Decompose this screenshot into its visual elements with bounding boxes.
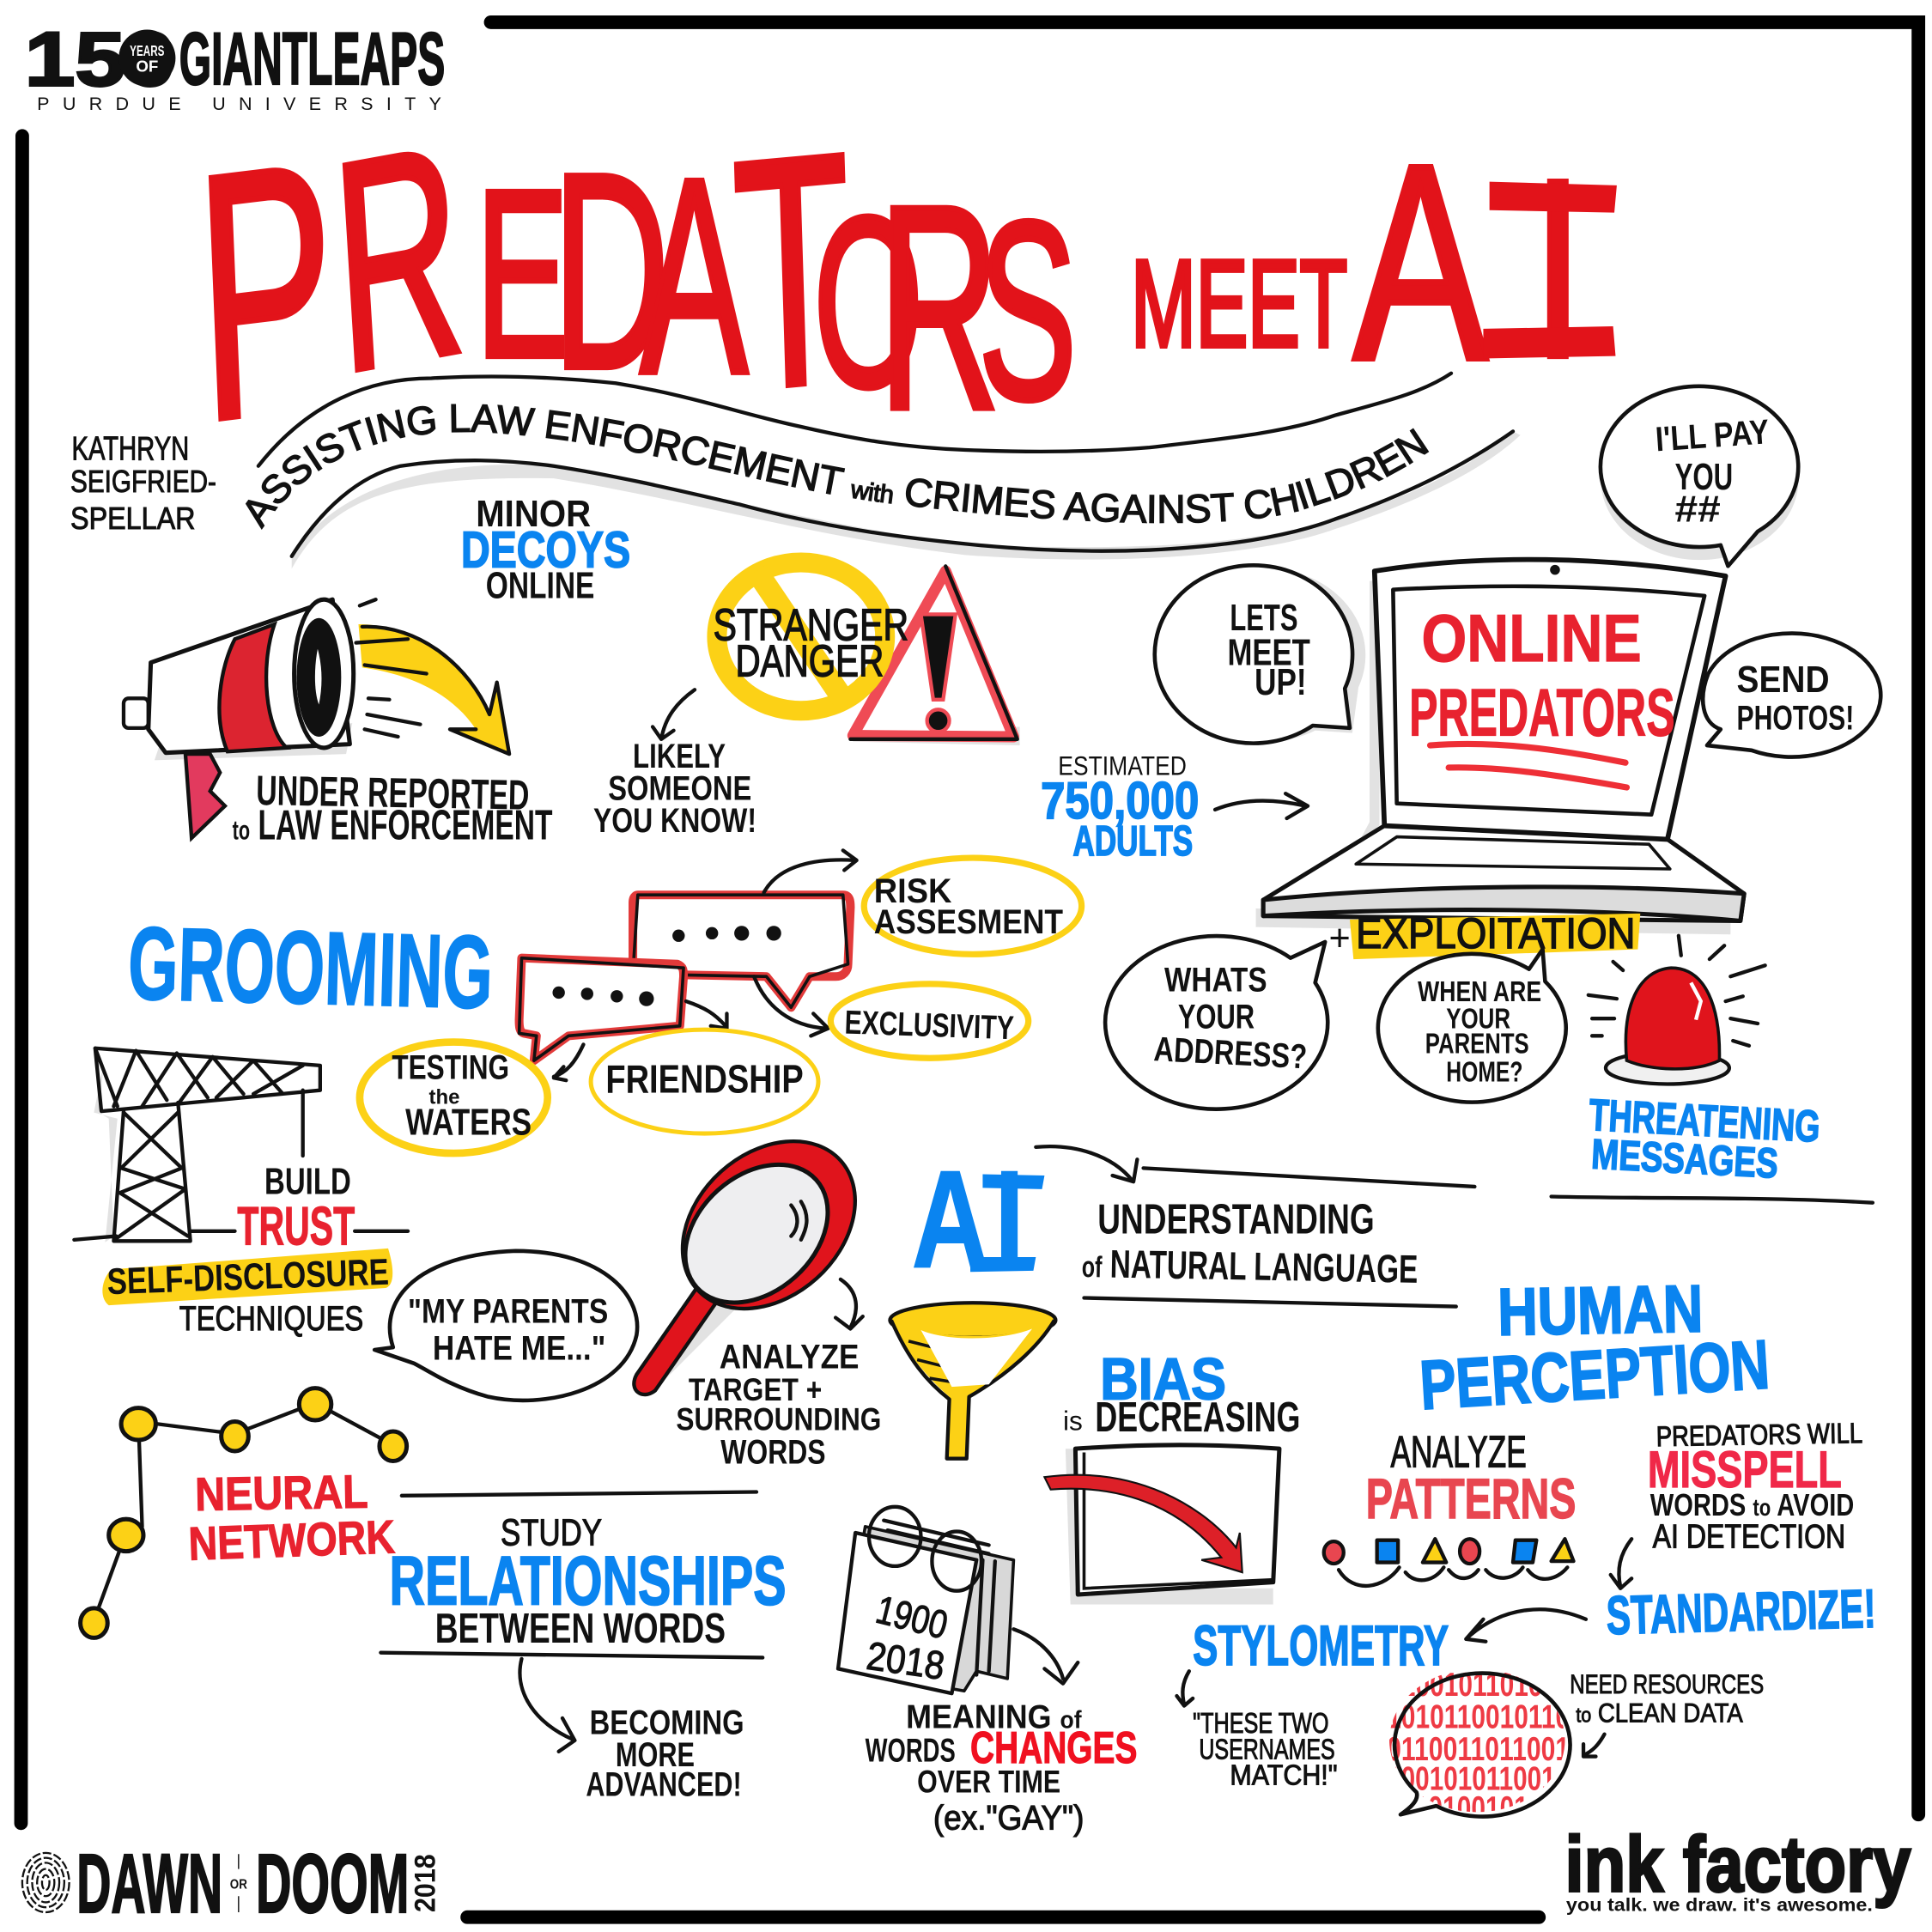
heading: human perception: PERCEPTION (1418, 1326, 1771, 1425)
presenter name: SEIGFRIED- (70, 464, 216, 499)
understanding of natural language (1036, 1146, 1474, 1307)
logo: 150 years of giant leaps: 150 (25, 15, 175, 101)
presenter name: KATHRYN (71, 431, 189, 468)
threatening messages: THREATENING (1588, 1090, 1821, 1151)
divider under threatening messages (1552, 1196, 1873, 1203)
logo: ink factory: you talk. we draw. it's awesome. (1566, 1894, 1873, 1916)
logo: 150 years of giant leaps: OF (136, 57, 158, 75)
stylometry: MATCH!" (1230, 1760, 1338, 1792)
screen text: online predators (1409, 602, 1675, 787)
exclusivity (830, 984, 1029, 1058)
speech bubble: I'll pay you (1601, 386, 1799, 566)
icon: calendar: 2018 (864, 1633, 947, 1688)
study relationships between words: STUDY (501, 1512, 602, 1553)
speech bubble: when are your parents home: YOUR (1446, 1004, 1510, 1036)
speech bubble: send photos: SEND (1737, 659, 1830, 701)
analyze patterns (1366, 1427, 1576, 1531)
predators will misspell words: MISSPELL (1648, 1440, 1842, 1498)
speech bubble: lets meet up: LETS (1230, 598, 1298, 639)
title (191, 82, 1617, 495)
subtitle banner (246, 371, 1520, 568)
icon: calendar (838, 1507, 1078, 1693)
logo: 150 years of giant leaps: PURDUE UNIVERSITY (37, 93, 441, 114)
likely someone you know: SOMEONE (608, 769, 751, 807)
speech bubble: lets meet up: UP! (1255, 662, 1307, 703)
need resources to clean data (1570, 1668, 1764, 1757)
study relationships between words (380, 1492, 787, 1752)
threatening messages: MESSAGES (1590, 1131, 1779, 1188)
meaning of words changes over time: WORDS (866, 1732, 956, 1769)
arrow to stylometry (1466, 1609, 1586, 1642)
logo: dawn or doom 2018: DOOM (256, 1836, 409, 1930)
title: MEET (1131, 234, 1347, 373)
analyze target + surrounding words: WORDS (720, 1432, 826, 1471)
icon: funnel (890, 1303, 1055, 1459)
minor decoys online: MINOR (476, 494, 591, 535)
screen text: online predators: ONLINE (1421, 602, 1642, 676)
need resources to clean data: NEED RESOURCES (1570, 1668, 1764, 1699)
exclusivity: EXCLUSIVITY (844, 1004, 1015, 1047)
minor decoys online: ONLINE (486, 566, 594, 607)
under reported text: UNDER REPORTED (256, 768, 530, 819)
estimated 750,000 adults (1041, 750, 1308, 865)
screen text: online predators: PREDATORS (1409, 677, 1675, 750)
speech bubble: when are your parents home: HOME? (1446, 1057, 1523, 1089)
becoming more advanced: MORE (616, 1735, 695, 1774)
icon: stranger danger prohibited sign (714, 562, 908, 711)
icon: laptop (1256, 560, 1744, 934)
stylometry: USERNAMES (1199, 1734, 1335, 1765)
build trust self-disclosure techniques: SELF-DISCLOSURE (106, 1252, 390, 1303)
stylometry: STYLOMETRY (1193, 1614, 1449, 1678)
icon: magnifying glass (634, 1107, 889, 1397)
estimated 750,000 adults: ADULTS (1073, 818, 1193, 865)
speech bubble: my parents hate me: HATE ME..." (433, 1328, 605, 1367)
heading: AI: I (994, 1143, 1024, 1297)
estimated 750,000 adults: ESTIMATED (1058, 750, 1187, 781)
speech bubble: my parents hate me: "MY PARENTS (408, 1291, 608, 1330)
stylometry (1176, 1614, 1449, 1792)
arrows from chat bubbles (554, 850, 857, 1080)
speech bubble: lets meet up: MEET (1227, 632, 1310, 673)
meaning of words changes over time (866, 1698, 1137, 1838)
heading: AI: A (912, 1143, 989, 1297)
speech bubble: binary data: 0110011011001 (1387, 1731, 1570, 1768)
becoming more advanced: ADVANCED! (586, 1765, 742, 1804)
presenter name: SPELLAR (70, 501, 195, 536)
speech bubble: I'll pay you: ## (1675, 489, 1721, 530)
logo: dawn or doom 2018: 2018 (410, 1854, 442, 1912)
stylometry: "THESE TWO (1193, 1708, 1329, 1740)
pattern shapes (1324, 1539, 1574, 1586)
speech bubble: binary data (1387, 1667, 1571, 1827)
analyze target + surrounding words: SURROUNDING (676, 1401, 881, 1437)
threatening messages (1588, 1090, 1821, 1188)
heading: human perception (1418, 1273, 1771, 1425)
meaning of words changes over time: (ex."GAY") (933, 1799, 1084, 1838)
friendship (591, 1030, 818, 1133)
meaning of words changes over time: MEANING of (906, 1698, 1082, 1735)
becoming more advanced (586, 1704, 744, 1804)
speech bubble: what's your address (1105, 936, 1327, 1109)
under reported text: to LAW ENFORCEMENT (233, 802, 553, 848)
chat bubbles (519, 895, 850, 1060)
presenter name (70, 431, 216, 536)
understanding of natural language: of NATURAL LANGUAGE (1081, 1241, 1419, 1291)
logo: 150 years of giant leaps: YEARS (130, 42, 164, 59)
bias is decreasing (1063, 1346, 1300, 1441)
title: E (476, 141, 568, 408)
icon: alarm siren (1589, 936, 1765, 1084)
testing the waters: WATERS (405, 1102, 532, 1143)
study relationships between words: RELATIONSHIPS (389, 1543, 787, 1620)
under reported text (233, 768, 553, 848)
predators will misspell words: PREDATORS WILL (1656, 1418, 1862, 1453)
becoming more advanced: BECOMING (590, 1704, 744, 1742)
title: R (878, 145, 999, 470)
meaning of words changes over time: OVER TIME (917, 1763, 1060, 1799)
testing the waters: TESTING (392, 1048, 509, 1087)
speech bubble: I'll pay you: YOU (1675, 457, 1733, 498)
heading: AI (912, 1143, 1044, 1297)
analyze target + surrounding words: ANALYZE (720, 1338, 859, 1376)
build trust self-disclosure techniques: BUILD (264, 1162, 351, 1203)
analyze patterns: PATTERNS (1366, 1467, 1576, 1531)
speech bubble: my parents hate me (374, 1251, 637, 1400)
likely someone you know: LIKELY (633, 737, 726, 775)
need resources to clean data: to CLEAN DATA (1576, 1697, 1744, 1728)
neural network (81, 1388, 407, 1637)
title: S (979, 170, 1077, 453)
logo: 150 years of giant leaps (25, 15, 445, 114)
bias is decreasing: BIAS (1100, 1346, 1226, 1413)
likely someone you know: YOU KNOW! (593, 801, 756, 840)
chart: bias decreasing arrow (1044, 1445, 1279, 1605)
title: I (1533, 127, 1583, 410)
title: O (814, 166, 923, 437)
heading: human perception: HUMAN (1498, 1273, 1704, 1350)
speech bubble: when are your parents home: WHEN ARE (1418, 976, 1541, 1008)
predators will misspell words: AI DETECTION (1653, 1518, 1845, 1555)
icon: warning triangle (850, 566, 1020, 745)
testing the waters: the (429, 1086, 460, 1109)
meaning of words changes over time: CHANGES (970, 1722, 1137, 1772)
risk assessment: ASSESMENT (874, 902, 1063, 941)
neural network: NETWORK (188, 1510, 396, 1571)
title: T (730, 84, 856, 459)
speech bubble: when are your parents home (1378, 950, 1566, 1103)
minor decoys online (461, 494, 630, 607)
build trust self-disclosure techniques (102, 1162, 392, 1338)
icon: stranger danger prohibited sign: DANGER (736, 635, 884, 685)
title: D (553, 116, 669, 427)
estimated 750,000 adults: 750,000 (1041, 771, 1199, 829)
risk assessment (864, 858, 1082, 954)
arrow: yellow swoosh (356, 599, 509, 754)
speech bubble: send photos: PHOTOS! (1737, 698, 1854, 737)
speech bubble: binary data: 1010110010110 (1387, 1698, 1570, 1735)
speech bubble: I'll pay you: I'LL PAY (1654, 412, 1771, 459)
bias is decreasing: DECREASING (1095, 1394, 1300, 1441)
predators will misspell words: WORDS to AVOID (1650, 1487, 1854, 1522)
heading: grooming: GROOMING (127, 905, 495, 1030)
icon: stranger danger prohibited sign: STRANGER (714, 600, 908, 650)
title: R (326, 82, 471, 436)
subtitle banner: ASSISTING LAW ENFORCEMENT with CRIMES AGAINST CHILDREN (246, 404, 1429, 530)
title: A (1353, 107, 1488, 417)
risk assessment: RISK (874, 872, 951, 910)
speech bubble: binary data: 0110100101101 (1387, 1790, 1570, 1827)
speech bubble: lets meet up (1155, 565, 1365, 744)
logo: 150 years of giant leaps: GIANTLEAPS (179, 18, 445, 100)
icon: crane (74, 1048, 408, 1242)
logo: dawn or doom 2018 (22, 1836, 442, 1930)
neural network: NEURAL (195, 1465, 368, 1521)
+ exploitation: + (1329, 918, 1351, 959)
title: P (191, 88, 342, 495)
speech bubble: when are your parents home: PARENTS (1425, 1028, 1529, 1060)
build trust self-disclosure techniques: TECHNIQUES (179, 1299, 363, 1338)
title: A (641, 121, 749, 432)
speech bubble: what's your address: YOUR (1178, 998, 1255, 1036)
testing the waters (360, 1042, 548, 1153)
minor decoys online: DECOYS (461, 522, 630, 579)
analyze patterns: ANALYZE (1390, 1427, 1527, 1477)
speech bubble: what's your address: WHATS (1164, 961, 1267, 999)
speech bubble: what's your address: ADDRESS? (1153, 1030, 1308, 1076)
likely someone you know (593, 690, 756, 840)
build trust self-disclosure techniques: TRUST (237, 1197, 355, 1257)
analyze target + surrounding words: TARGET + (689, 1371, 822, 1407)
study relationships between words: BETWEEN WORDS (435, 1606, 726, 1652)
friendship: FRIENDSHIP (605, 1057, 804, 1102)
bias is decreasing: is (1063, 1406, 1083, 1437)
understanding of natural language: UNDERSTANDING (1097, 1197, 1375, 1243)
analyze target + surrounding words (676, 1279, 881, 1471)
icon: calendar: 1900 (872, 1587, 952, 1648)
speech bubble: send photos (1703, 634, 1880, 757)
+ exploitation: EXPLOITATION (1356, 908, 1636, 957)
icon: megaphone (124, 599, 354, 838)
logo: dawn or doom 2018: DAWN (76, 1836, 222, 1930)
speech bubble: binary data: 1001010110010 (1387, 1760, 1570, 1797)
predators will misspell words (1611, 1418, 1862, 1589)
speech bubble: binary data: 0100101101011 (1387, 1667, 1570, 1704)
logo: dawn or doom 2018: OR (230, 1878, 247, 1893)
